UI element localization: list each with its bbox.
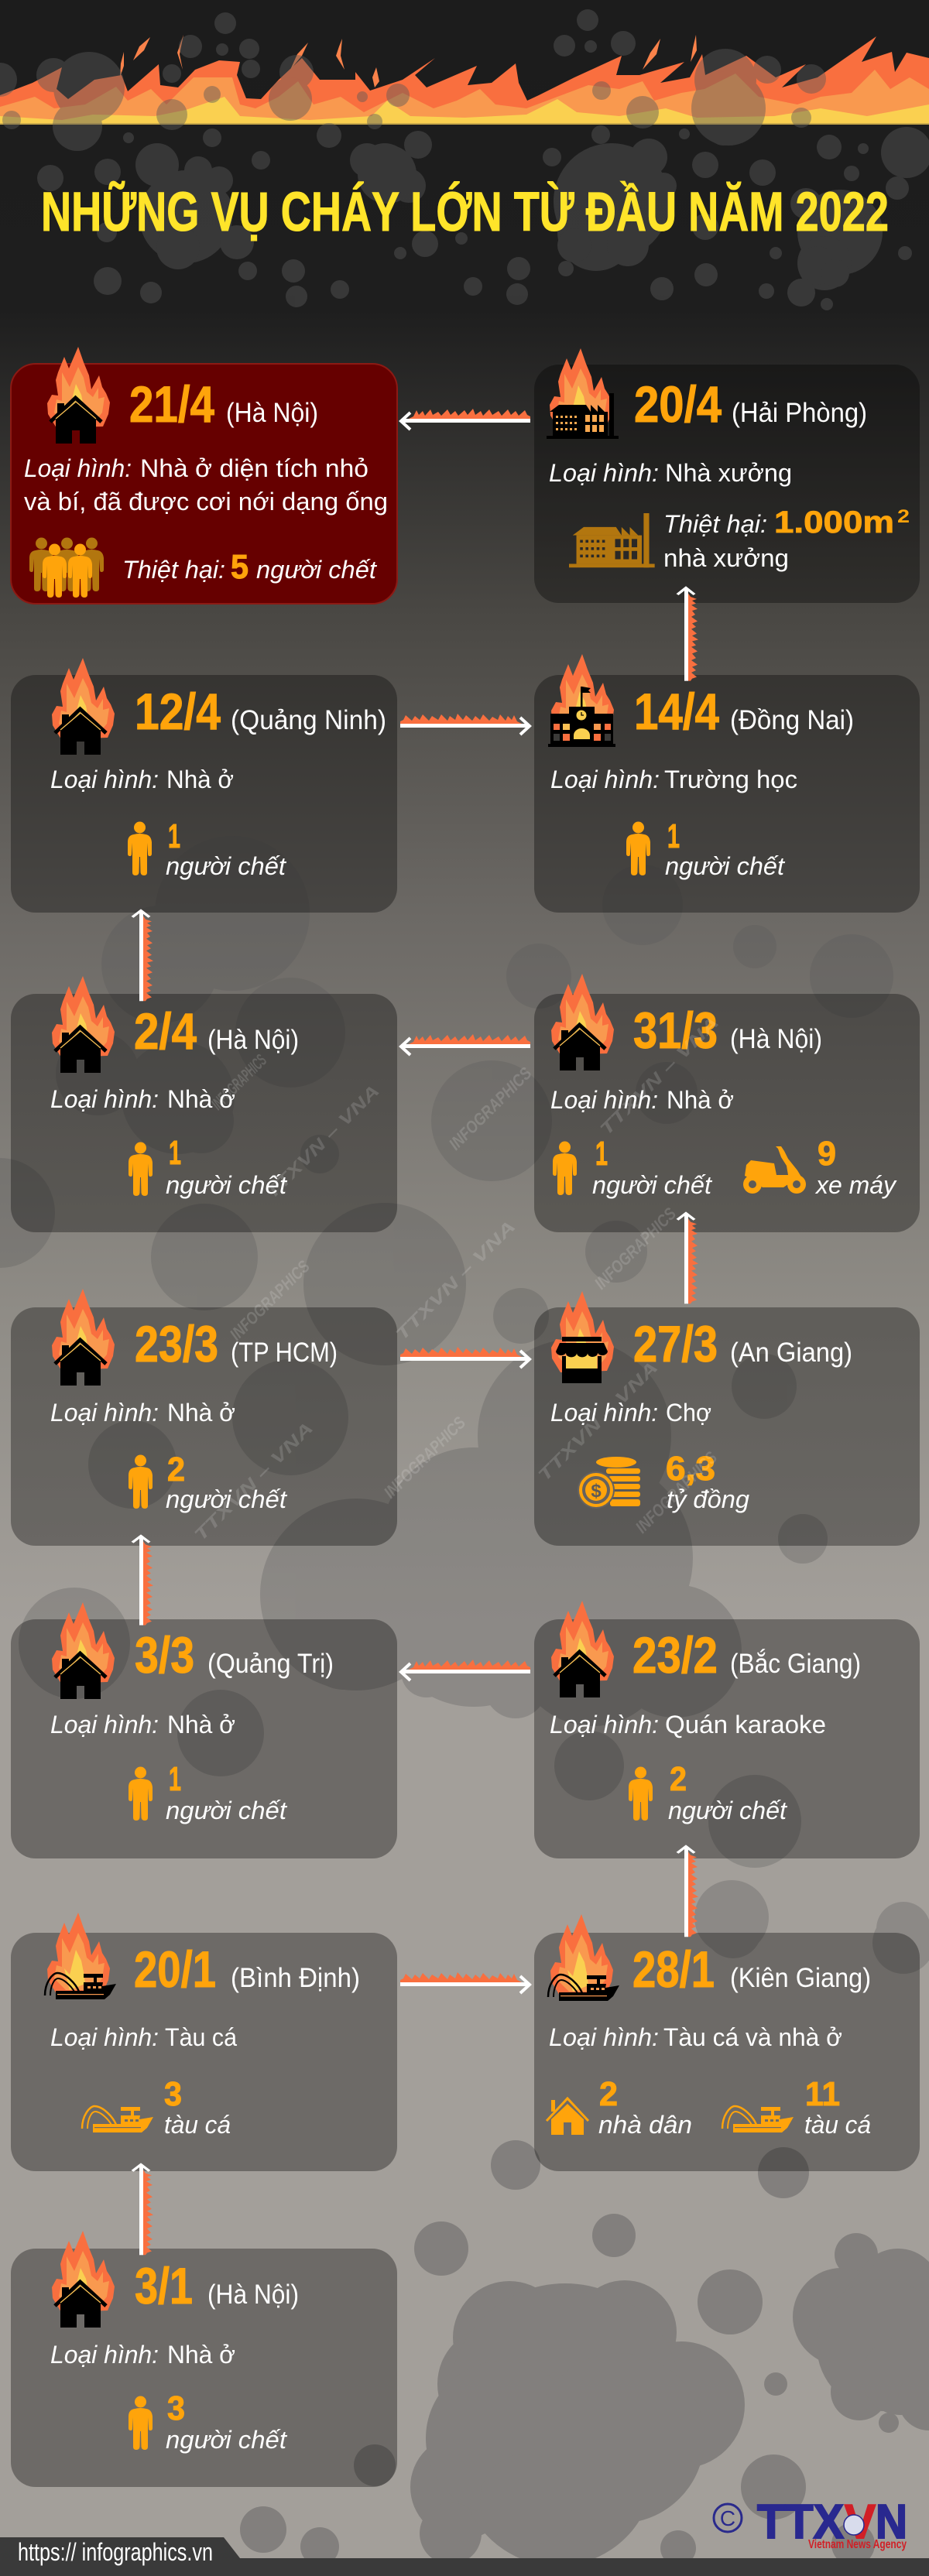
icon: coins xyxy=(578,1457,640,1509)
arrow: 28/1 to 23/2 xyxy=(677,1846,698,1937)
icon: burning house xyxy=(551,974,614,1070)
type label: Loại hình: xyxy=(549,2023,659,2051)
type value: Nhà ở xyxy=(166,766,234,793)
watermarks: TTXVN – VNA xyxy=(534,1358,662,1485)
icon: person xyxy=(128,822,152,875)
icon: burning house xyxy=(52,2231,115,2328)
logo: TTXVN: TTX xyxy=(757,2496,844,2549)
type value: Nhà xưởng xyxy=(665,459,792,487)
house unit: nhà dân xyxy=(598,2111,692,2139)
death unit: người chết xyxy=(166,852,286,880)
icon: burning house xyxy=(52,658,115,755)
flame band xyxy=(0,35,929,125)
location: (TP HCM) xyxy=(231,1338,338,1368)
type label: Loại hình: xyxy=(50,1399,159,1427)
death unit: người chết xyxy=(665,852,785,880)
icon: factory xyxy=(569,513,655,567)
logo: TTXVN: C xyxy=(720,2506,735,2530)
death count: 1 xyxy=(595,1135,608,1173)
boat count: 3 xyxy=(164,2075,182,2113)
arrow: 20/4 to 21/4 xyxy=(401,409,530,430)
icon: burning boat xyxy=(45,1913,116,1999)
type value: Nhà ở xyxy=(167,1711,235,1738)
type label: Loại hình: xyxy=(550,1711,659,1738)
watermarks: INFOGRAPHICS xyxy=(207,1050,270,1114)
arrow: 20/1 to 28/1 xyxy=(400,1972,530,1993)
panel: 3/3 Quảng Trị xyxy=(11,1602,397,1858)
location: (Kiên Giang) xyxy=(730,1963,871,1993)
icon: burning house xyxy=(551,1601,614,1697)
death unit: người chết xyxy=(668,1797,787,1824)
vehicle count: 9 xyxy=(818,1135,836,1173)
watermarks: INFOGRAPHICS xyxy=(445,1064,536,1154)
location: (Hà Nội) xyxy=(730,1024,822,1054)
panel: 23/3 TP HCM xyxy=(11,1289,397,1546)
watermarks: INFOGRAPHICS xyxy=(591,1204,680,1293)
damage value: 6,3 xyxy=(666,1450,715,1488)
location: (Hà Nội) xyxy=(226,398,318,428)
logo: TTXVN xyxy=(714,2496,907,2551)
death count: 1 xyxy=(168,817,180,855)
panel: 2/4 Hà Nội xyxy=(11,976,397,1232)
location: (Bình Định) xyxy=(231,1963,360,1993)
watermarks: INFOGRAPHICS xyxy=(380,1413,469,1502)
icon: coins: $ xyxy=(591,1481,602,1502)
icon: burning boat xyxy=(548,1914,619,2001)
location: (Hà Nội) xyxy=(207,2280,299,2310)
icon: house xyxy=(547,2098,588,2135)
location: (Hải Phòng) xyxy=(732,398,867,428)
logo: TTXVN: V xyxy=(845,2496,876,2549)
background smoke: top xyxy=(0,9,929,310)
death unit: người chết xyxy=(592,1171,712,1199)
panel: 21/4 Hà Nội xyxy=(11,347,397,604)
panel: 20/4 Hải Phòng xyxy=(534,348,920,603)
icon: person xyxy=(129,2396,153,2450)
type value: Chợ xyxy=(666,1399,711,1427)
location: (Đồng Nai) xyxy=(730,705,854,735)
death count: 1 xyxy=(169,1134,181,1172)
boat unit: tàu cá xyxy=(804,2111,871,2139)
icon: boat xyxy=(722,2106,794,2132)
damage number: 1.000m xyxy=(774,505,894,540)
type label: Loại hình: xyxy=(550,766,660,793)
icon: person xyxy=(553,1141,577,1195)
type label: Loại hình: xyxy=(50,1711,159,1738)
date: 28/1 xyxy=(632,1941,715,1998)
date: 23/3 xyxy=(135,1315,218,1372)
type value: Nhà ở diện tích nhỏ xyxy=(140,454,369,482)
type label: Loại hình: xyxy=(550,1399,658,1427)
background smoke: middle xyxy=(0,836,929,1974)
watermarks: INFOGRAPHICS xyxy=(226,1256,314,1345)
watermarks: TTXVN – VNA xyxy=(392,1217,519,1345)
icon: person xyxy=(629,1766,653,1821)
icon: person xyxy=(129,1142,153,1196)
location: (Hà Nội) xyxy=(207,1025,299,1055)
arrow: 3/3 to 23/3 xyxy=(132,1536,153,1625)
arrow: 14/4 to 20/4 xyxy=(677,587,698,681)
date: 3/1 xyxy=(135,2257,193,2314)
arrow: 3/1 to 20/1 xyxy=(132,2164,153,2255)
footer bar xyxy=(0,2537,929,2576)
death unit: người chết xyxy=(166,2426,287,2454)
icon: motorbike xyxy=(743,1146,806,1194)
location: (Quảng Ninh) xyxy=(231,705,386,735)
watermarks: TTXVN – VNA xyxy=(190,1418,317,1545)
date: 12/4 xyxy=(135,683,221,740)
type value: Nhà ở xyxy=(167,2341,235,2369)
type label: Loại hình: xyxy=(50,2023,159,2051)
superscript 2: 2 xyxy=(897,506,910,527)
type label: Loại hình: xyxy=(24,454,132,482)
logo: TTXVN: N xyxy=(876,2496,907,2549)
house count: 2 xyxy=(599,2075,618,2113)
footer url: https:// infographics.vn xyxy=(18,2538,213,2566)
arrow: 12/4 to 14/4 xyxy=(400,714,530,735)
icon: burning factory xyxy=(547,348,619,439)
damage label: Thiệt hại: xyxy=(122,556,225,584)
vehicle unit: xe máy xyxy=(814,1171,897,1199)
type value: Trường học xyxy=(664,766,797,793)
type label: Loại hình: xyxy=(50,766,159,793)
damage label: Thiệt hại: xyxy=(663,510,767,538)
arrow: 23/2 to 3/3 xyxy=(401,1660,530,1680)
watermarks xyxy=(190,1012,722,1545)
date: 27/3 xyxy=(633,1315,718,1372)
death unit: người chết xyxy=(166,1485,287,1513)
icon: burning market stall xyxy=(551,1291,614,1383)
damage unit: nhà xưởng xyxy=(663,544,789,572)
date: 14/4 xyxy=(634,683,719,740)
icon: burning house xyxy=(52,1602,115,1699)
date: 21/4 xyxy=(129,375,214,433)
location: (An Giang) xyxy=(730,1338,852,1368)
watermarks: TTXVN – VNA xyxy=(596,1012,722,1139)
icon: boat xyxy=(82,2106,153,2132)
type value: Nhà ở xyxy=(667,1086,734,1114)
type value: Quán karaoke xyxy=(665,1711,826,1738)
panel: 12/4 Quảng Ninh xyxy=(11,658,397,913)
panel: 27/3 An Giang xyxy=(534,1291,920,1546)
type value: Nhà ở xyxy=(167,1399,235,1427)
death count: 2 xyxy=(167,1451,185,1488)
type value: Tàu cá xyxy=(165,2023,237,2051)
icon: person xyxy=(626,822,650,875)
arrow: 31/3 to 2/4 xyxy=(401,1034,530,1055)
date: 2/4 xyxy=(134,1002,197,1060)
damage number: 5 xyxy=(231,548,249,586)
icon: group of people xyxy=(29,537,104,598)
panel: 3/1 Hà Nội xyxy=(11,2231,397,2487)
watermarks: TTXVN – VNA xyxy=(262,1081,383,1203)
icon: burning house xyxy=(52,1289,115,1386)
panel: 31/3 Hà Nội xyxy=(534,974,920,1232)
panel: 28/1 Kiên Giang xyxy=(534,1914,920,2171)
panel: 14/4 Đồng Nai xyxy=(534,654,920,913)
type label: Loại hình: xyxy=(549,459,659,487)
date: 31/3 xyxy=(633,1002,718,1059)
arrow: 23/3 to 27/3 xyxy=(400,1347,530,1368)
date: 20/1 xyxy=(134,1941,216,1998)
type value line 2: và bí, đã được cơi nới dạng ống xyxy=(24,488,388,516)
boat count: 11 xyxy=(805,2075,840,2113)
date: 20/4 xyxy=(634,375,722,433)
type label: Loại hình: xyxy=(50,1085,159,1113)
icon: burning house xyxy=(47,347,110,444)
damage unit: người chết xyxy=(256,556,377,584)
date: 23/2 xyxy=(632,1626,718,1684)
panel: 23/2 Bắc Giang xyxy=(534,1601,920,1858)
death count: 1 xyxy=(667,817,680,855)
death unit: người chết xyxy=(166,1797,287,1824)
icon: burning school xyxy=(548,654,615,747)
icon: person xyxy=(129,1455,153,1509)
death unit: người chết xyxy=(166,1171,287,1199)
icon: burning house xyxy=(52,976,115,1073)
boat unit: tàu cá xyxy=(164,2111,231,2139)
location: (Bắc Giang) xyxy=(730,1649,861,1679)
type value: Nhà ở xyxy=(167,1085,235,1113)
arrow: 27/3 to 31/3 xyxy=(677,1213,698,1303)
death count: 3 xyxy=(167,2389,185,2427)
damage unit: tỷ đồng xyxy=(667,1485,749,1513)
location: (Quảng Trị) xyxy=(207,1649,334,1679)
panel: 20/1 Bình Định xyxy=(11,1913,397,2171)
background smoke: bottom xyxy=(240,2140,929,2566)
type label: Loại hình: xyxy=(50,2341,159,2369)
watermarks: INFOGRAPHICS xyxy=(632,1447,721,1537)
type label: Loại hình: xyxy=(550,1086,658,1114)
death count: 2 xyxy=(670,1760,687,1798)
death count: 1 xyxy=(169,1760,181,1798)
type value: Tàu cá và nhà ở xyxy=(663,2023,842,2051)
date: 3/3 xyxy=(135,1626,194,1684)
arrow: 2/4 to 12/4 xyxy=(132,910,153,1001)
icon: person xyxy=(129,1766,153,1821)
